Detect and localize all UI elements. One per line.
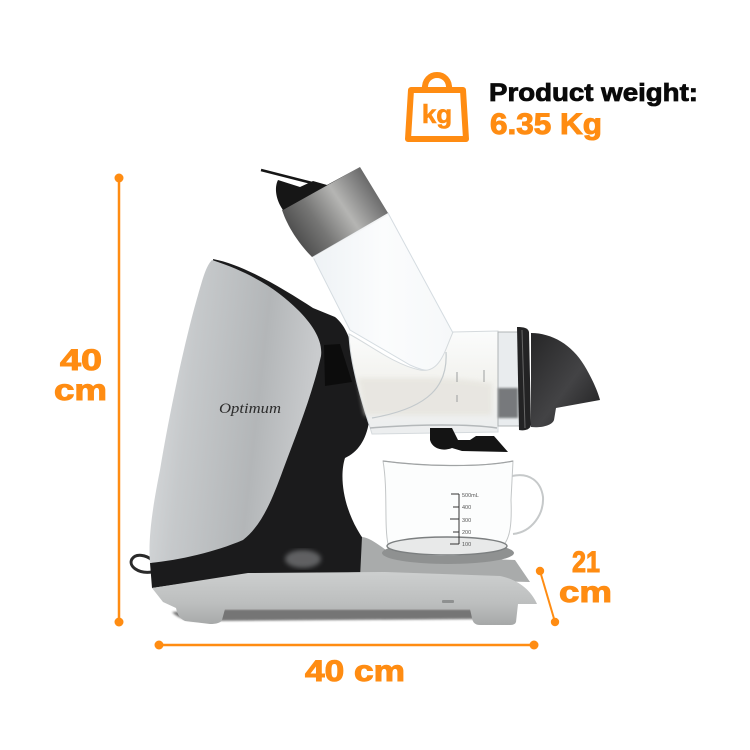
dimension: width: 40 cm (305, 655, 405, 688)
glass jug: 500mL (462, 493, 479, 499)
dimension: height: 40 (60, 344, 102, 377)
power cord (131, 555, 152, 572)
outlet rings (517, 327, 531, 430)
heading: product weight: 6.35 Kg (490, 108, 602, 141)
silver jug deck (360, 537, 530, 582)
juice spout (430, 428, 508, 452)
silver base (152, 572, 537, 625)
juicer product illustration (131, 167, 600, 625)
black lid (276, 167, 360, 210)
dimension: height (54, 174, 124, 626)
glass jug: 200 (462, 530, 471, 536)
jug scale (450, 494, 459, 544)
silver side panel (149, 260, 321, 563)
dimension: depth: cm (559, 576, 612, 609)
logo text: Optimum (219, 401, 281, 417)
jug plate (382, 542, 514, 564)
glass jug: 100 (462, 542, 471, 548)
black outlet cap (531, 333, 600, 427)
icon: weight bag (408, 75, 466, 139)
dimension: width (154, 640, 538, 688)
glass jug: 300 (462, 518, 471, 524)
heading: product weight: Product weight: (489, 79, 698, 107)
dimension: depth (536, 546, 612, 626)
black motor body (150, 259, 385, 588)
heading: product weight (489, 79, 698, 141)
clear juicing chamber (349, 331, 498, 434)
dimension: depth: 21 (572, 546, 600, 579)
glass jug: 400 (462, 505, 471, 511)
steel collar (282, 167, 388, 257)
icon: weight bag: kg (422, 99, 452, 129)
dimension: height: cm (54, 374, 107, 407)
glass jug (383, 461, 543, 556)
clear hopper tube (313, 213, 453, 371)
base shadow (172, 609, 480, 621)
